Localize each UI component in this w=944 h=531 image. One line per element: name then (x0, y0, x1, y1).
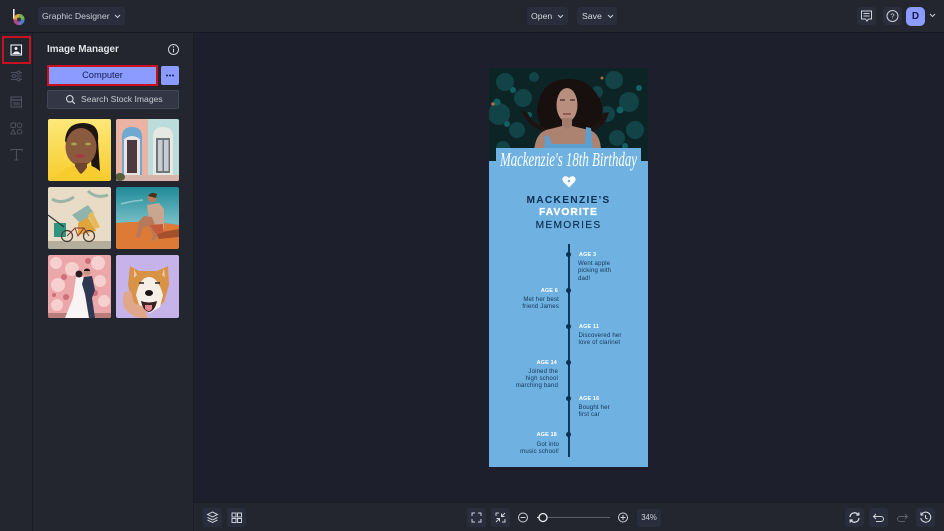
icon: undo (869, 508, 888, 527)
entry: age 16: first car (578, 411, 600, 418)
heading: Image Manager (47, 44, 119, 55)
panel: image manager (33, 33, 194, 531)
entry: age 14 (516, 360, 571, 389)
photo: pastel doors (116, 119, 179, 181)
photo: wedding couple (48, 255, 111, 318)
entry: age 3: dad! (578, 275, 590, 282)
shoulders (534, 126, 601, 152)
poster: birthday timeline (489, 68, 648, 467)
icon: heart (562, 176, 576, 188)
photo: shiba dog (116, 255, 179, 318)
icon: refresh (845, 508, 864, 527)
face (556, 88, 578, 122)
entry: age 18: Got into (536, 440, 559, 448)
timeline (516, 244, 622, 457)
poster photo: woman among leaves (489, 68, 648, 161)
heading: favorite memories: FAVORITE (539, 207, 598, 218)
logo (13, 9, 24, 25)
heading: favorite memories: MEMORIES (536, 220, 601, 231)
entry: age 6: AGE 6 (541, 288, 558, 294)
icon: account chevron (930, 14, 936, 18)
save dropdown (577, 7, 617, 25)
timeline spine (568, 244, 570, 457)
icon: comments (857, 7, 876, 25)
icon: help: ? (890, 12, 895, 21)
entry: age 3: AGE 3 (579, 252, 596, 258)
icon: graphics (10, 122, 22, 134)
icon: grid (227, 508, 246, 527)
entry: age 6: Met her best (523, 296, 559, 303)
entry: age 6 (522, 288, 571, 310)
entry: age 18: music school! (520, 448, 559, 455)
save dropdown: Save (582, 11, 602, 21)
open dropdown: Open (531, 11, 552, 21)
title ribbon (496, 148, 641, 164)
entry: age 14: AGE 14 (537, 360, 557, 366)
user avatar (906, 7, 925, 26)
entry: age 3: picking with (578, 267, 611, 274)
icon: redo (897, 514, 908, 522)
more options button (161, 66, 179, 85)
icon: history (916, 508, 935, 527)
entry: age 11 (566, 324, 622, 346)
icon: fit to screen (467, 508, 486, 527)
heading: favorite memories (526, 195, 611, 231)
entry: age 16: AGE 16 (579, 396, 599, 402)
icon: search (66, 95, 76, 104)
entry: age 11: AGE 11 (579, 324, 599, 330)
zoom percent: 34% (641, 513, 657, 522)
icon: layouts (10, 96, 22, 108)
entry: age 14: marching band (516, 382, 558, 389)
entry: age 11: love of clarinet (578, 339, 620, 346)
photo: bicycle and mural (48, 187, 111, 249)
search stock images button (47, 90, 179, 109)
icon: images, selected (2, 36, 31, 64)
entry: age 16 (566, 396, 610, 418)
computer upload button: Computer (82, 70, 123, 80)
zoom slider (518, 512, 628, 522)
photo: man on sand (116, 187, 179, 249)
search stock images button: Search Stock Images (81, 94, 163, 104)
entry: age 18: AGE 18 (537, 432, 557, 438)
icon: info (168, 44, 179, 55)
user avatar: D (912, 11, 919, 22)
project type dropdown: Graphic Designer (42, 11, 110, 21)
icon: adjustments (11, 70, 22, 82)
entry: age 14: high school (526, 375, 558, 382)
icon: layers (203, 508, 222, 527)
entry: age 14: Joined the (528, 368, 558, 374)
icon: help (883, 7, 902, 25)
entry: age 11: Discovered her (578, 332, 622, 339)
entry: age 18 (520, 432, 571, 455)
left icon rail (0, 33, 33, 531)
photo: woman on yellow (48, 119, 111, 181)
icon: actual size (491, 508, 510, 527)
top bar (0, 0, 944, 33)
open dropdown (527, 7, 568, 25)
entry: age 6: friend James (522, 303, 559, 310)
project type dropdown (38, 7, 125, 25)
icon: text (10, 149, 22, 160)
bottom toolbar (194, 502, 944, 531)
entry: age 16: Bought her (578, 404, 610, 411)
entry: age 3 (566, 252, 611, 282)
dress (544, 127, 593, 152)
computer upload button (47, 65, 158, 86)
hair (537, 79, 603, 133)
zoom percent (637, 509, 661, 527)
entry: age 3: Went apple (578, 260, 610, 267)
heading: favorite memories: MACKENZIE'S (526, 195, 611, 206)
